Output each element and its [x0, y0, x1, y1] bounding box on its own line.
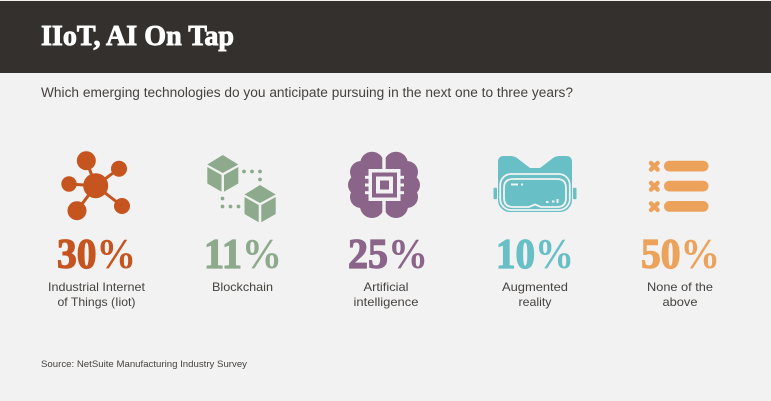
label line 2: reality: [518, 295, 552, 309]
label: Augmented: [502, 280, 568, 294]
icon: VR headset: [494, 156, 576, 212]
icon: crossed list: [651, 161, 708, 212]
value 30%: 30%: [57, 232, 136, 278]
icon: brain with chip: [348, 150, 420, 220]
value 11%: 11%: [204, 232, 282, 278]
survey question: Which emerging technologies do you anticipate pursuing in the next one to three years?: [41, 85, 573, 100]
title: IIoT, AI On Tap: [41, 21, 234, 52]
icon: linked cubes: [207, 155, 276, 222]
label line 2: above: [662, 295, 698, 309]
column: augmented reality: [494, 156, 576, 309]
value 50%: 50%: [641, 232, 720, 278]
label: None of the: [647, 280, 713, 294]
label line 2: intelligence: [354, 295, 419, 309]
label: Artificial: [364, 280, 408, 294]
source note: Source: NetSuite Manufacturing Industry Survey: [41, 359, 247, 370]
column: industrial internet of things: [48, 151, 146, 309]
value 10%: 10%: [496, 232, 574, 278]
icon: network nodes: [61, 151, 130, 220]
column: blockchain: [204, 155, 282, 294]
value 25%: 25%: [348, 232, 428, 278]
label: Blockchain: [212, 280, 273, 294]
label line 2: of Things (Iiot): [58, 295, 136, 309]
header band: [0, 1, 771, 73]
column: none of the above: [641, 161, 720, 309]
column: artificial intelligence: [348, 150, 428, 309]
label: Industrial Internet: [48, 280, 146, 294]
